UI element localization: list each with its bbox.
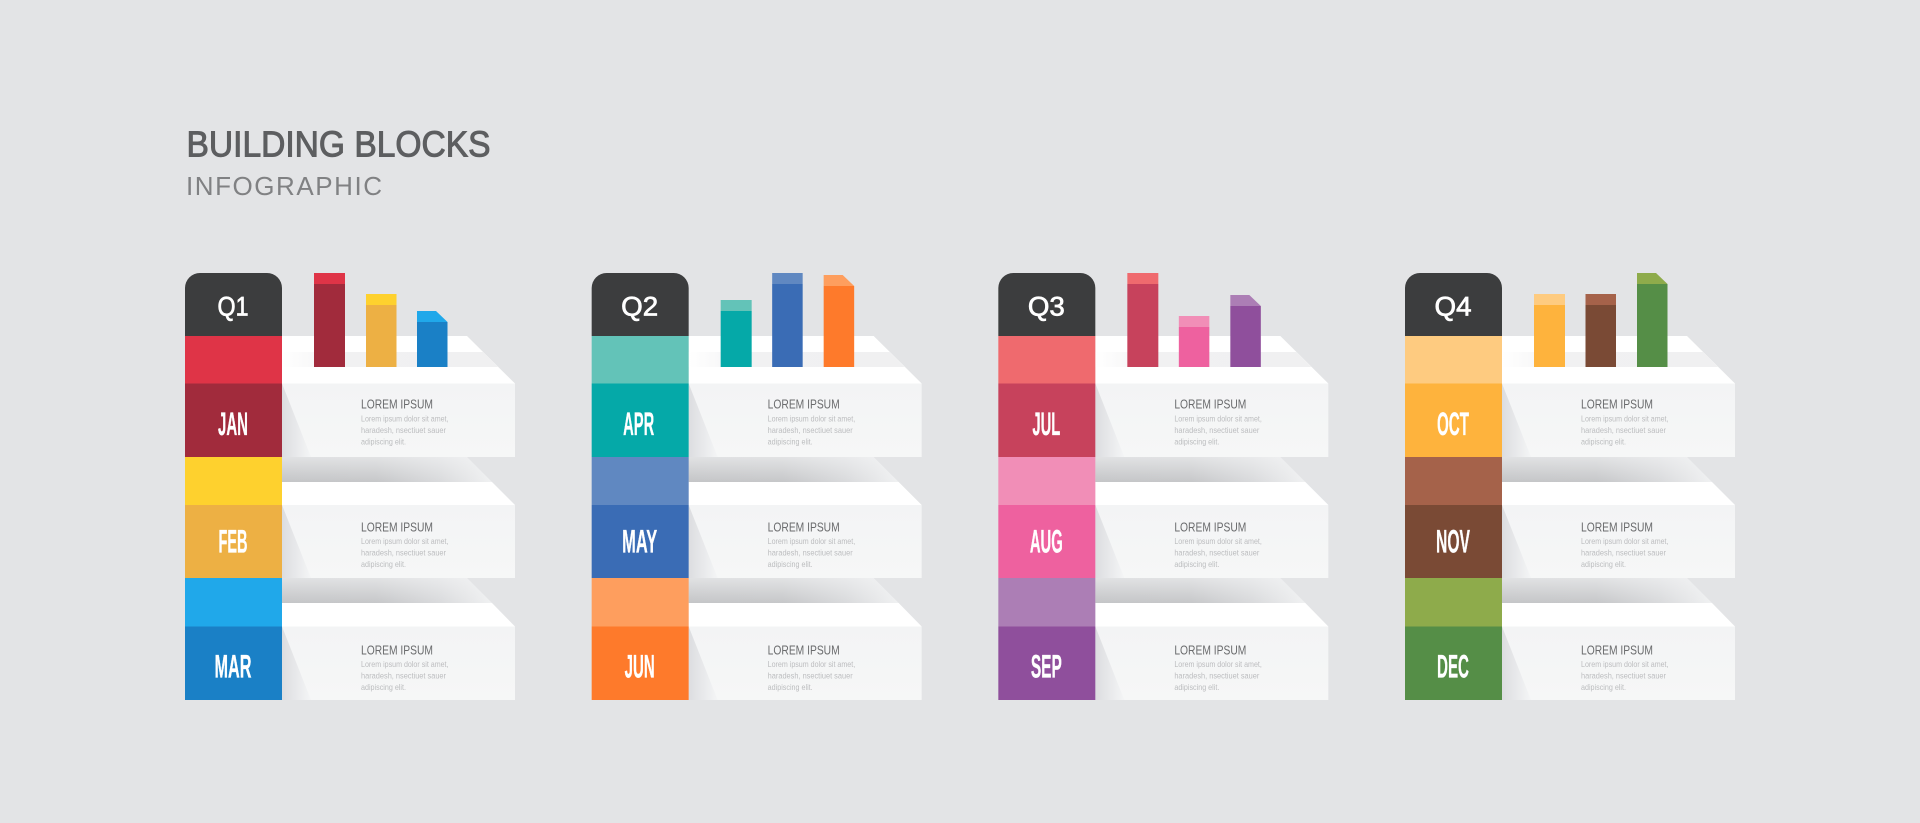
text block: August: adipiscing elit. xyxy=(1174,559,1219,569)
platform: October xyxy=(1502,336,1735,457)
text block: January: haradesh, nsectiuet sauer xyxy=(361,425,446,435)
month block: SEP: SEP xyxy=(1031,648,1062,684)
text block: September: haradesh, nsectiuet sauer xyxy=(1174,670,1259,680)
month block: OCT xyxy=(1405,336,1502,457)
quarter tab: Q1: Q1 xyxy=(218,292,248,322)
bar chart: Q1 xyxy=(314,273,448,367)
month block: MAR: MAR xyxy=(214,648,252,684)
month block: AUG xyxy=(998,457,1095,578)
month block: OCT: OCT xyxy=(1437,406,1469,442)
text block: March: haradesh, nsectiuet sauer xyxy=(361,670,446,680)
month block: JUN xyxy=(592,578,689,700)
month block: AUG: AUG xyxy=(1030,524,1063,560)
text block: May: adipiscing elit. xyxy=(768,559,813,569)
quarter tab: Q4 xyxy=(1405,273,1502,336)
quarter tab: Q1 xyxy=(185,273,282,336)
text block: July: Lorem ipsum dolor sit amet, xyxy=(1174,414,1262,424)
bar chart: Q3 xyxy=(1127,273,1261,367)
month block: SEP xyxy=(998,578,1095,700)
text block: October: adipiscing elit. xyxy=(1581,436,1626,446)
platform: July xyxy=(1095,336,1328,457)
platform: March xyxy=(282,578,515,700)
text block: May: Lorem ipsum dolor sit amet, xyxy=(768,536,855,546)
text block: December: LOREM IPSUM xyxy=(1581,642,1653,658)
text block: October xyxy=(1581,396,1668,446)
text block: April: Lorem ipsum dolor sit amet, xyxy=(768,414,855,424)
panel: Q2 xyxy=(592,273,922,700)
text block: November: adipiscing elit. xyxy=(1581,559,1626,569)
text block: February xyxy=(361,520,448,569)
text block: February: haradesh, nsectiuet sauer xyxy=(361,548,446,558)
text block: November: Lorem ipsum dolor sit amet, xyxy=(1581,536,1668,546)
text block: May xyxy=(768,520,855,569)
text block: December: adipiscing elit. xyxy=(1581,682,1626,692)
month block: MAR xyxy=(185,578,282,700)
platform: August xyxy=(1095,457,1328,578)
quarter tab: Q4: Q4 xyxy=(1434,292,1472,322)
month block: JUL xyxy=(998,336,1095,457)
platform: April xyxy=(689,336,922,457)
platform: January xyxy=(282,336,515,457)
platform: May xyxy=(689,457,922,578)
month block: MAY xyxy=(592,457,689,578)
text block: June: haradesh, nsectiuet sauer xyxy=(768,670,853,680)
text block: November: LOREM IPSUM xyxy=(1581,520,1653,534)
month block: JUL: JUL xyxy=(1032,406,1060,442)
month block: NOV xyxy=(1405,457,1502,578)
text block: November: haradesh, nsectiuet sauer xyxy=(1581,548,1666,558)
text block: July: adipiscing elit. xyxy=(1174,436,1219,446)
text block: March: adipiscing elit. xyxy=(361,682,406,692)
platform: November xyxy=(1502,457,1735,578)
text block: April: LOREM IPSUM xyxy=(768,396,840,412)
title block xyxy=(186,124,490,201)
month block: APR xyxy=(592,336,689,457)
month block: APR: APR xyxy=(623,406,654,442)
text block: August: LOREM IPSUM xyxy=(1174,520,1246,534)
text block: July xyxy=(1174,396,1262,446)
quarter tab: Q2 xyxy=(592,273,689,336)
quarter tab: Q3: Q3 xyxy=(1028,292,1065,322)
platform: February xyxy=(282,457,515,578)
month block: JAN xyxy=(185,336,282,457)
platform: December xyxy=(1502,578,1735,700)
text block: March xyxy=(361,642,448,692)
text block: September: LOREM IPSUM xyxy=(1174,642,1246,658)
month block: JAN: JAN xyxy=(218,406,248,442)
text block: February: LOREM IPSUM xyxy=(361,520,433,534)
text block: February: Lorem ipsum dolor sit amet, xyxy=(361,536,448,546)
text block: October: LOREM IPSUM xyxy=(1581,396,1653,412)
platform: June xyxy=(689,578,922,700)
heading: building blocks: BUILDING BLOCKS xyxy=(186,124,490,164)
panel: Q1 xyxy=(185,273,515,700)
month block: DEC xyxy=(1405,578,1502,700)
month block: JUN: JUN xyxy=(625,648,655,684)
text block: April: adipiscing elit. xyxy=(768,436,813,446)
bar chart: Q4 xyxy=(1534,273,1668,367)
text block: August: haradesh, nsectiuet sauer xyxy=(1174,548,1259,558)
month block: FEB: FEB xyxy=(218,524,248,560)
month block: NOV: NOV xyxy=(1436,524,1470,560)
bar chart: Q2 xyxy=(721,273,854,367)
text block: October: haradesh, nsectiuet sauer xyxy=(1581,425,1666,435)
text block: October: Lorem ipsum dolor sit amet, xyxy=(1581,414,1668,424)
text block: January: Lorem ipsum dolor sit amet, xyxy=(361,414,448,424)
text block: November xyxy=(1581,520,1668,569)
text block: March: LOREM IPSUM xyxy=(361,642,433,658)
text block: April: haradesh, nsectiuet sauer xyxy=(768,425,853,435)
text block: December xyxy=(1581,642,1668,692)
text block: April xyxy=(768,396,855,446)
text block: January xyxy=(361,396,448,446)
text block: February: adipiscing elit. xyxy=(361,559,406,569)
text block: June: LOREM IPSUM xyxy=(768,642,840,658)
text block: August xyxy=(1174,520,1262,569)
text block: July: LOREM IPSUM xyxy=(1174,396,1246,412)
subheading: infographic: INFOGRAPHIC xyxy=(186,171,382,201)
text block: July: haradesh, nsectiuet sauer xyxy=(1174,425,1259,435)
month block: MAY: MAY xyxy=(622,524,657,560)
text block: June xyxy=(768,642,855,692)
text block: September: adipiscing elit. xyxy=(1174,682,1219,692)
text block: June: Lorem ipsum dolor sit amet, xyxy=(768,659,855,669)
panel: Q3 xyxy=(998,273,1328,700)
month block: FEB xyxy=(185,457,282,578)
text block: August: Lorem ipsum dolor sit amet, xyxy=(1174,536,1262,546)
panel: Q4 xyxy=(1405,273,1735,700)
text block: March: Lorem ipsum dolor sit amet, xyxy=(361,659,448,669)
text block: January: LOREM IPSUM xyxy=(361,396,433,412)
text block: September: Lorem ipsum dolor sit amet, xyxy=(1174,659,1262,669)
text block: May: LOREM IPSUM xyxy=(768,520,840,534)
text block: September xyxy=(1174,642,1262,692)
month block: DEC: DEC xyxy=(1437,648,1469,684)
platform: September xyxy=(1095,578,1328,700)
text block: June: adipiscing elit. xyxy=(768,682,813,692)
text block: May: haradesh, nsectiuet sauer xyxy=(768,548,853,558)
text block: January: adipiscing elit. xyxy=(361,436,406,446)
quarter tab: Q3 xyxy=(998,273,1095,336)
quarter tab: Q2: Q2 xyxy=(621,292,658,322)
text block: December: haradesh, nsectiuet sauer xyxy=(1581,670,1666,680)
text block: December: Lorem ipsum dolor sit amet, xyxy=(1581,659,1668,669)
